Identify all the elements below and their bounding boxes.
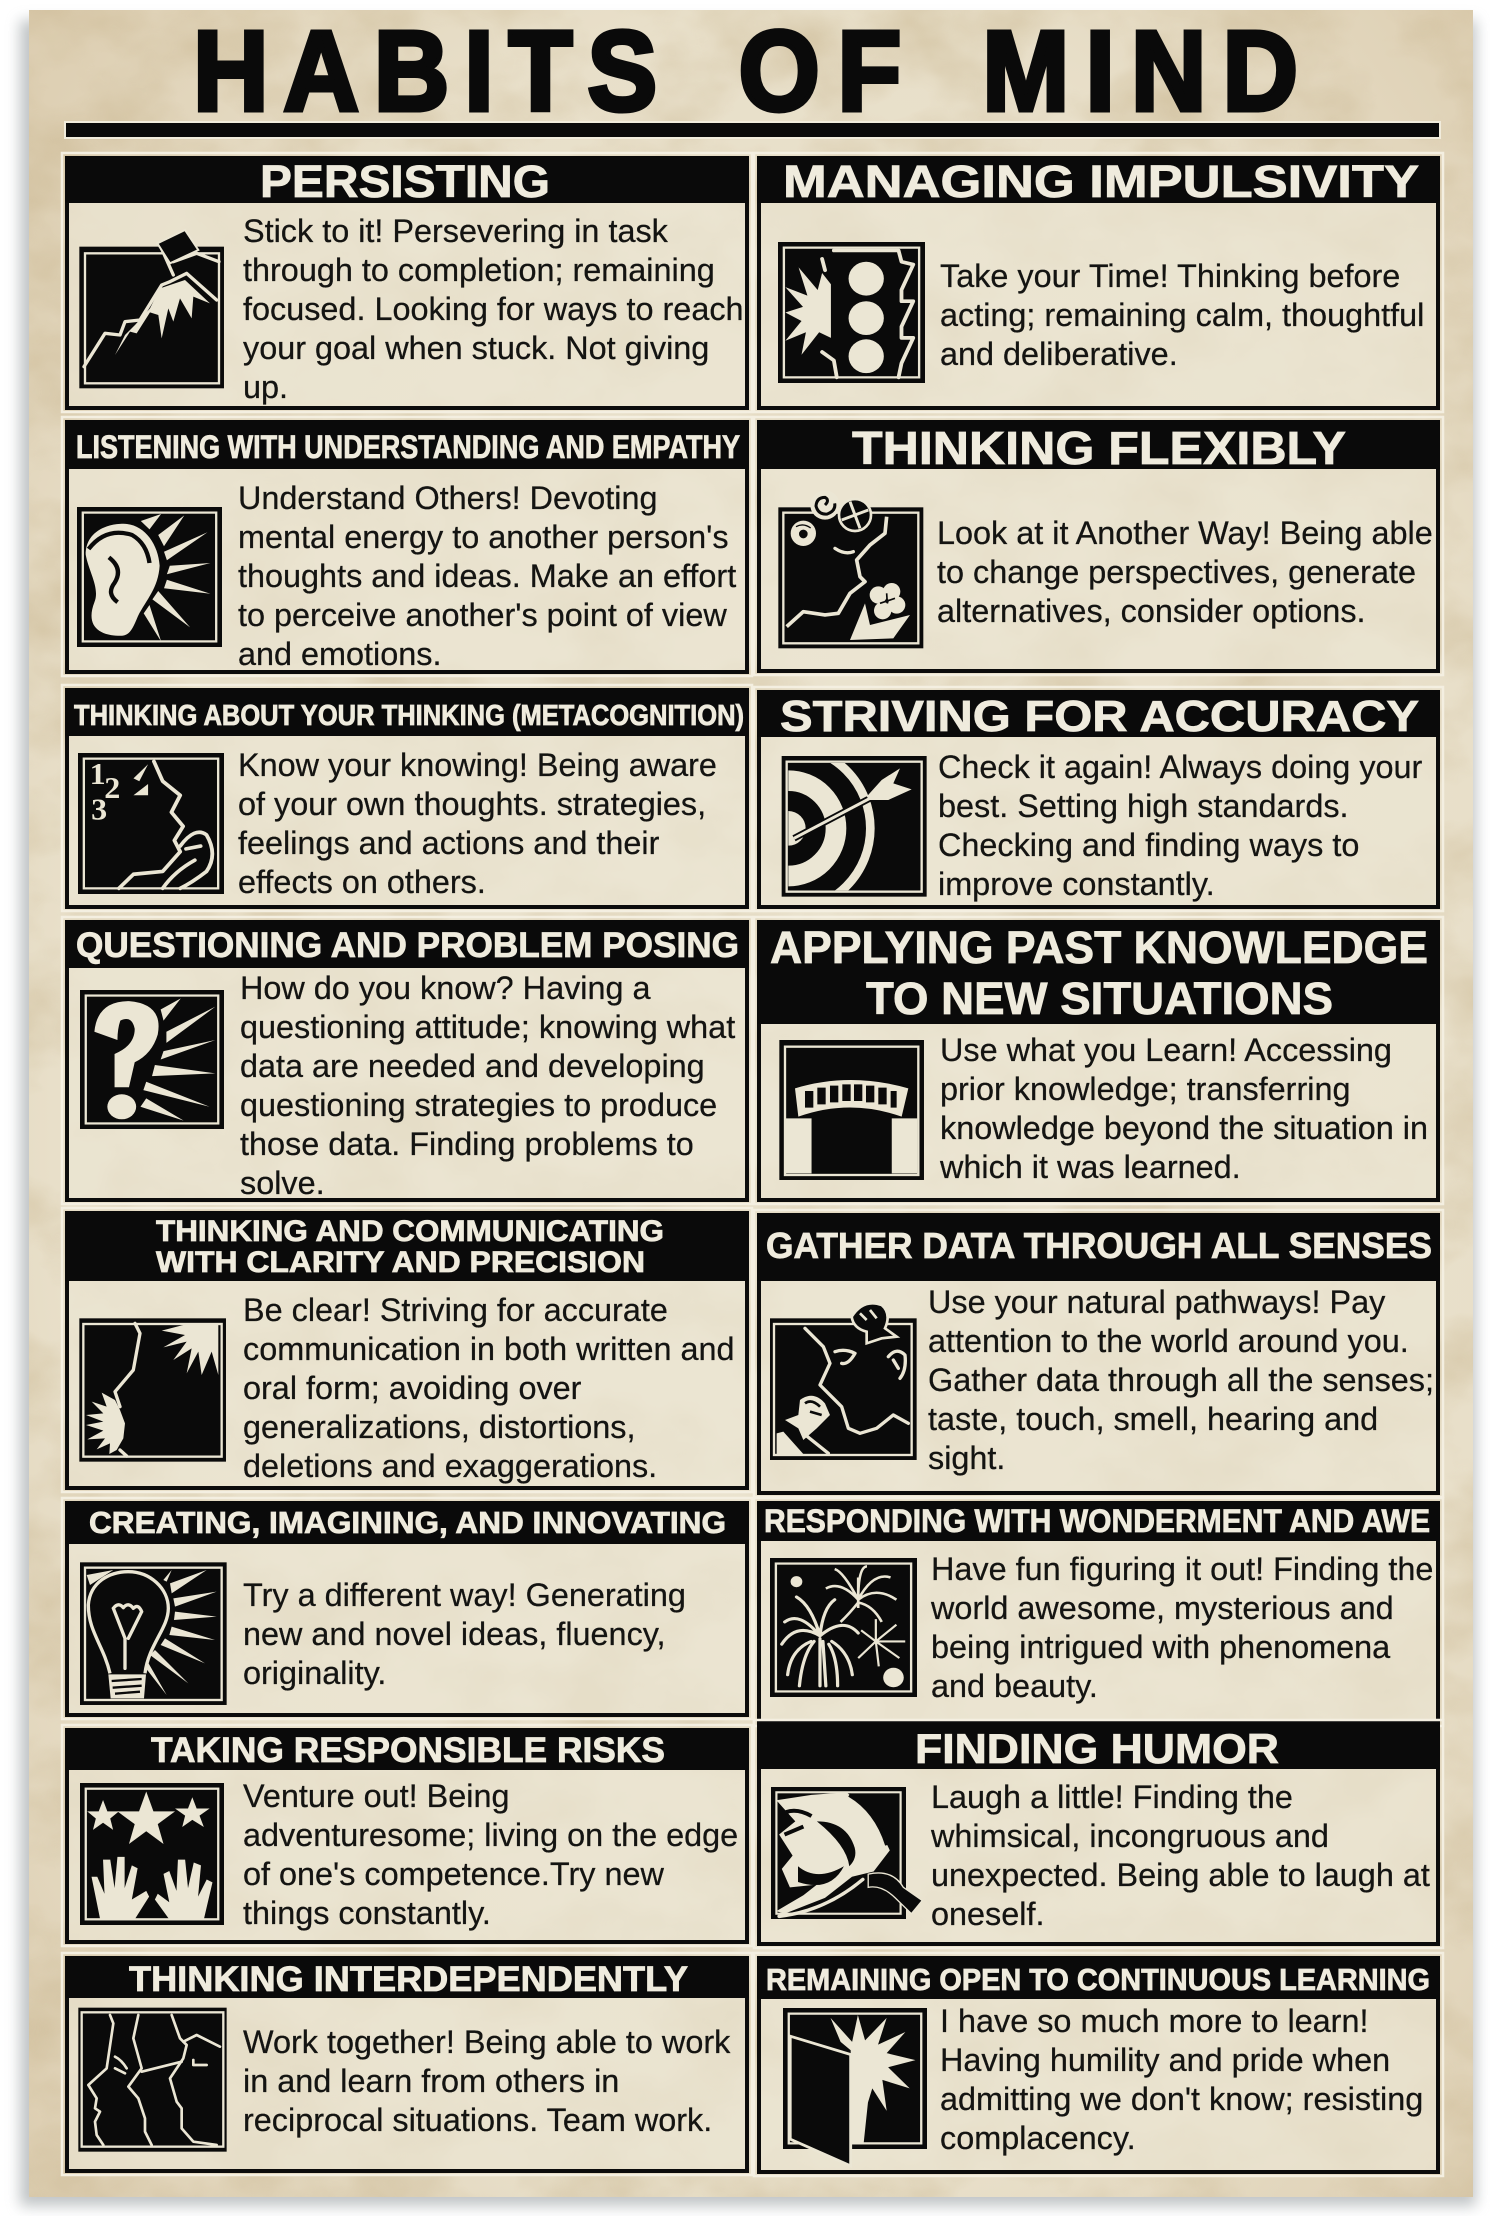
icon: two profiles with bursts <box>79 1318 226 1462</box>
description: Use what you Learn! Accessing <box>940 1032 1392 1068</box>
icon: ear with rays <box>77 507 222 647</box>
heading: LISTENING WITH UNDERSTANDING AND EMPATHY <box>76 429 740 465</box>
icon: fireworks <box>770 1558 917 1697</box>
icon: head counting thoughts <box>78 753 224 894</box>
description: things constantly. <box>243 1895 491 1931</box>
description: of your own thoughts. strategies, <box>238 786 706 822</box>
description: alternatives, consider options. <box>937 593 1366 629</box>
description: admitting we don't know; resisting <box>940 2081 1423 2117</box>
description: Look at it Another Way! Being able <box>937 515 1433 551</box>
icon: swirling thoughts profile <box>778 490 923 648</box>
description: originality. <box>243 1655 386 1691</box>
description: of one's competence.Try new <box>243 1856 664 1892</box>
icon: hands reaching for stars <box>80 1783 224 1925</box>
panel: responding with wonderment and awe <box>754 1498 1443 1726</box>
panel: managing impulsivity <box>754 153 1443 412</box>
icon: face with roses <box>770 1303 917 1460</box>
heading: THINKING INTERDEPENDENTLY <box>129 1960 688 1999</box>
heading: GATHER DATA THROUGH ALL SENSES <box>766 1225 1432 1266</box>
description: through to completion; remaining <box>243 252 715 288</box>
description: reciprocal situations. Team work. <box>243 2102 712 2138</box>
icon: head counting thoughts: 1 <box>90 757 106 791</box>
description: I have so much more to learn! <box>940 2003 1368 2039</box>
description: Use your natural pathways! Pay <box>928 1284 1386 1320</box>
description: world awesome, mysterious and <box>930 1590 1394 1626</box>
description: Know your knowing! Being aware <box>238 747 717 783</box>
title: OF <box>739 9 919 135</box>
heading: PERSISTING <box>260 156 550 207</box>
heading: QUESTIONING AND PROBLEM POSING <box>76 926 739 965</box>
icon: laughing face <box>771 1787 922 1919</box>
description: complacency. <box>940 2120 1136 2156</box>
description: focused. Looking for ways to reach <box>243 291 744 327</box>
description: best. Setting high standards. <box>938 788 1349 824</box>
panel: thinking flexibly <box>754 417 1443 675</box>
title: MIND <box>983 9 1314 135</box>
icon: three profiles <box>78 2008 227 2152</box>
description: Check it again! Always doing your <box>938 749 1423 785</box>
description: and emotions. <box>238 636 441 672</box>
panel: taking responsible risks <box>62 1725 752 1946</box>
description: thoughts and ideas. Make an effort <box>238 558 736 594</box>
description: those data. Finding problems to <box>240 1126 694 1162</box>
description: unexpected. Being able to laugh at <box>931 1857 1430 1893</box>
panel: finding humor <box>754 1720 1443 1948</box>
description: questioning strategies to produce <box>240 1087 717 1123</box>
description: in and learn from others in <box>243 2063 619 2099</box>
panel: persisting <box>62 153 752 412</box>
description: being intrigued with phenomena <box>931 1629 1391 1665</box>
description: and beauty. <box>931 1668 1098 1704</box>
description: deletions and exaggerations. <box>243 1448 657 1484</box>
description: acting; remaining calm, thoughtful <box>940 297 1424 333</box>
description: mental energy to another person's <box>238 519 729 555</box>
panel: gather data through all senses <box>754 1210 1443 1497</box>
heading: MANAGING IMPULSIVITY <box>783 156 1419 207</box>
description: oneself. <box>931 1896 1044 1932</box>
icon: question mark with rays <box>80 990 224 1129</box>
description: Try a different way! Generating <box>243 1577 686 1613</box>
title rule <box>65 122 1440 138</box>
description: data are needed and developing <box>240 1048 705 1084</box>
description: Understand Others! Devoting <box>238 480 658 516</box>
description: Take your Time! Thinking before <box>940 258 1400 294</box>
heading: FINDING HUMOR <box>915 1725 1279 1772</box>
description: Work together! Being able to work <box>243 2024 731 2060</box>
description: and deliberative. <box>940 336 1178 372</box>
description: Having humility and pride when <box>940 2042 1390 2078</box>
description: Laugh a little! Finding the <box>931 1779 1293 1815</box>
description: Gather data through all the senses; <box>928 1362 1434 1398</box>
icon: mountain with flag <box>79 230 224 388</box>
description: to perceive another's point of view <box>238 597 727 633</box>
description: attention to the world around you. <box>928 1323 1409 1359</box>
icon: bridge <box>779 1040 924 1180</box>
panel: creating, imagining, and innovating <box>62 1498 752 1719</box>
heading: REMAINING OPEN TO CONTINUOUS LEARNING <box>766 1962 1430 1997</box>
panel: listening with understanding and empathy <box>62 417 752 676</box>
description: taste, touch, smell, hearing and <box>928 1401 1378 1437</box>
heading: THINKING AND COMMUNICATING <box>156 1215 664 1248</box>
heading: WITH CLARITY AND PRECISION <box>156 1246 645 1279</box>
panel: questioning and problem posing <box>62 917 752 1204</box>
icon: target with arrow <box>782 756 927 897</box>
heading: THINKING FLEXIBLY <box>852 422 1346 474</box>
description: feelings and actions and their <box>238 825 660 861</box>
icon: light bulb <box>80 1562 227 1705</box>
description: to change perspectives, generate <box>937 554 1416 590</box>
heading: CREATING, IMAGINING, AND INNOVATING <box>89 1505 726 1540</box>
heading: RESPONDING WITH WONDERMENT AND AWE <box>764 1503 1430 1539</box>
description: Stick to it! Persevering in task <box>243 213 669 249</box>
description: generalizations, distortions, <box>243 1409 636 1445</box>
panel: thinking interdependently <box>62 1953 752 2175</box>
panel: thinking about your thinking <box>62 685 752 911</box>
icon: head counting thoughts: 2 <box>104 771 120 805</box>
heading: THINKING ABOUT YOUR THINKING (METACOGNITION) <box>74 700 744 732</box>
description: Be clear! Striving for accurate <box>243 1292 668 1328</box>
description: adventuresome; living on the edge <box>243 1817 738 1853</box>
description: which it was learned. <box>939 1149 1241 1185</box>
heading: TAKING RESPONSIBLE RISKS <box>151 1731 665 1770</box>
panel: applying past knowledge <box>754 917 1443 1204</box>
description: solve. <box>240 1165 325 1201</box>
description: improve constantly. <box>938 866 1215 902</box>
description: your goal when stuck. Not giving <box>243 330 709 366</box>
panel: striving for accuracy <box>706 687 1443 911</box>
description: How do you know? Having a <box>240 970 651 1006</box>
description: prior knowledge; transferring <box>940 1071 1350 1107</box>
heading: STRIVING FOR ACCURACY <box>780 692 1419 741</box>
description: new and novel ideas, fluency, <box>243 1616 666 1652</box>
description: effects on others. <box>238 864 486 900</box>
description: Venture out! Being <box>243 1778 510 1814</box>
panel: thinking and communicating with clarity and precision <box>62 1208 752 1492</box>
icon: open door with light <box>783 2008 927 2166</box>
description: knowledge beyond the situation in <box>940 1110 1428 1146</box>
icon: head counting thoughts: 3 <box>91 792 107 826</box>
description: sight. <box>928 1440 1005 1476</box>
description: oral form; avoiding over <box>243 1370 582 1406</box>
description: Have fun figuring it out! Finding the <box>931 1551 1433 1587</box>
title: HABITS <box>193 9 672 135</box>
description: up. <box>243 369 288 405</box>
heading <box>770 922 1428 1024</box>
description: whimsical, incongruous and <box>930 1818 1329 1854</box>
description: Checking and finding ways to <box>938 827 1359 863</box>
description: questioning attitude; knowing what <box>240 1009 735 1045</box>
panel: remaining open to continuous learning <box>754 1953 1443 2176</box>
heading <box>156 1215 664 1279</box>
description: communication in both written and <box>243 1331 735 1367</box>
icon: traffic light <box>778 242 925 383</box>
heading: APPLYING PAST KNOWLEDGE <box>770 922 1428 973</box>
heading: TO NEW SITUATIONS <box>866 973 1333 1024</box>
